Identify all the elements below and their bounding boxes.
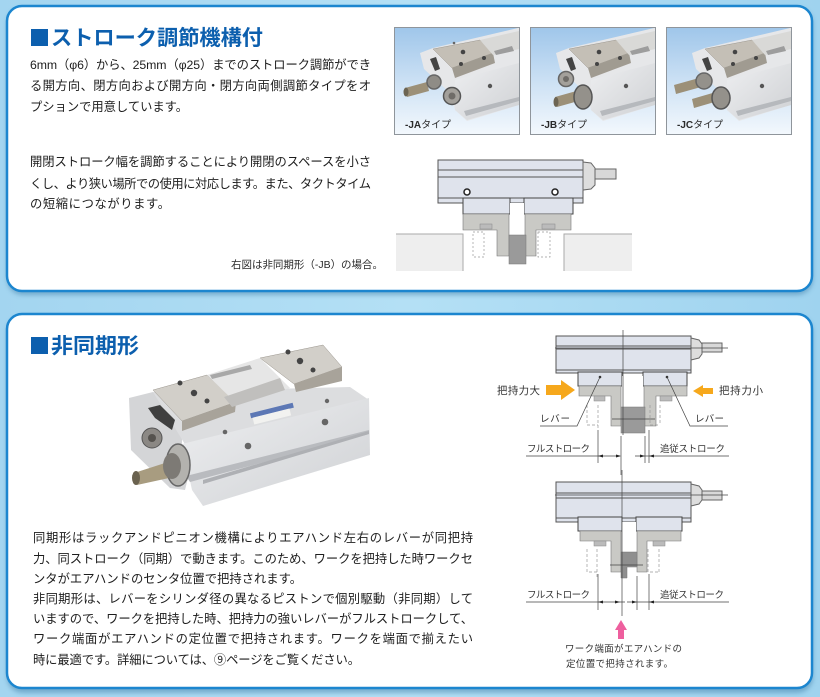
arrow: large gripping force (546, 380, 575, 400)
text block: synchronous versus asynchronous explanation: ワーク端面がエアハンドの定位置で把持されます。ワークを端面で揃えたい (33, 631, 473, 646)
label: work end position note: 定位置で把持されます。 (566, 658, 673, 670)
label: large gripping force: 把持力大 (497, 384, 540, 397)
panel: asynchronous type (7, 314, 813, 693)
photo: JB type: -JBタイプ (541, 119, 587, 131)
photo: air hand product (129, 345, 370, 506)
text block: stroke adjustment options: プションで用意しています。 (30, 100, 188, 114)
label: following stroke: 追従ストローク (660, 589, 724, 601)
text block: synchronous versus asynchronous explanation: いますので、ワークを把持した時、把持力の強いレバーがフルストロークして、 (33, 611, 473, 626)
panel: stroke adjustment mechanism (7, 6, 813, 295)
heading: asynchronous type: 非同期形 (51, 335, 139, 358)
label: following stroke: 追従ストローク (660, 443, 725, 455)
label: work end position note (565, 643, 682, 670)
text block: stroke width benefit: くし、より狭い場所での使用に対応します。また、タクトタイム (30, 176, 371, 191)
text block: stroke adjustment options: 6mm（φ6）から、25mm（φ25）までのストローク調節ができ (30, 57, 371, 72)
text block: synchronous versus asynchronous explanation: ンタがエアハンドのセンタ位置で把持されます。 (33, 571, 302, 586)
photo: JC type (666, 28, 792, 134)
arrow: work end position (615, 620, 627, 639)
diagram: workpiece end positioned gripping (526, 470, 729, 670)
photo: JB type (530, 28, 656, 134)
text block: synchronous versus asynchronous explanation: 同期形はラックアンドピニオン機構によりエアハンド左右のレバーが同把持 (33, 530, 473, 545)
label: right lever: レバー (695, 414, 724, 425)
photo: JA type: -JAタイプ (405, 119, 451, 131)
text block: stroke width benefit: 開閉ストローク幅を調節することにより開閉のスペースを小さ (30, 154, 371, 169)
text block: synchronous versus asynchronous explanation (33, 530, 473, 667)
heading: stroke adjustment: ストローク調節機構付 (51, 27, 263, 50)
text block: synchronous versus asynchronous explanation: 時に最適です。詳細については、⑨ページをご覧ください。 (33, 652, 360, 667)
text block: stroke adjustment options (30, 57, 371, 114)
text block: synchronous versus asynchronous explanation: 力、同ストローク（同期）で動きます。このため、ワークを把持した時ワークセ (33, 551, 473, 566)
caption: figure note: 右図は非同期形（-JB）の場合。 (231, 258, 383, 271)
photo: JC type: -JCタイプ (677, 119, 723, 131)
label: full stroke: フルストローク (527, 590, 590, 601)
text block: stroke adjustment options: る開方向、閉方向および開方向・閉方向両側調節タイプをオ (30, 78, 371, 93)
diagram: gripping with full and following stroke (497, 330, 764, 475)
label: full stroke: フルストローク (527, 444, 590, 455)
text block: stroke width benefit: の短縮につながります。 (30, 196, 170, 211)
text block: stroke width benefit (30, 154, 371, 211)
photo: JA type (394, 28, 520, 134)
label: left lever: レバー (540, 414, 570, 425)
text block: synchronous versus asynchronous explanation: 非同期形は、レバーをシリンダ径の異なるピストンで個別駆動（非同期）して (33, 591, 473, 606)
diagram: JB stroke adjusted hand (396, 160, 632, 271)
label: work end position note: ワーク端面がエアハンドの (565, 643, 682, 655)
arrow: small gripping force (693, 385, 713, 397)
label: small gripping force: 把持力小 (719, 384, 764, 397)
